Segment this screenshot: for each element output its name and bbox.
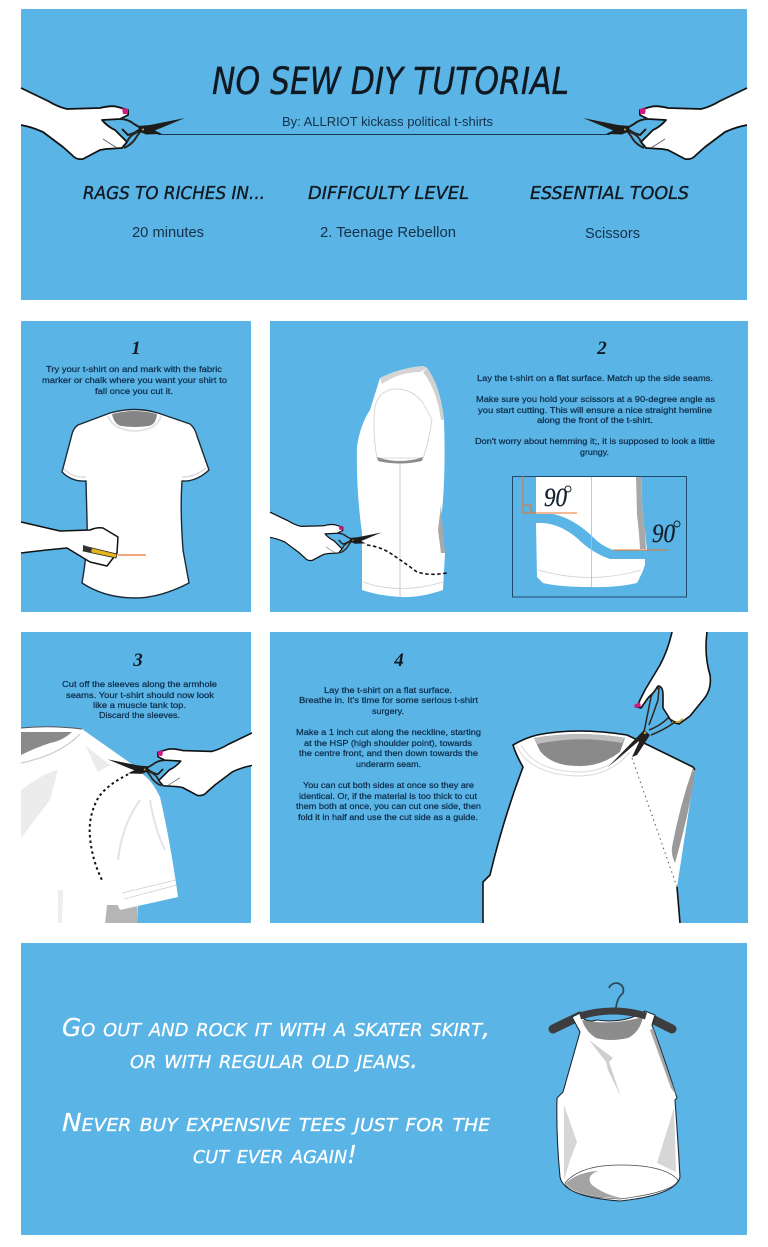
step 2 instructions: you start cutting. This will ensure a nice straight hemline [478,405,712,415]
panel: header [21,9,747,300]
orange mark line [118,554,146,556]
icon: left hand with scissors [21,88,185,159]
closing text: Never buy expensive tees just for the [62,1108,491,1137]
step 4 instructions: fold it in half and use the cut side as a guide. [298,812,478,822]
step 1 instructions [42,364,227,396]
step 1 instructions: fall once you cut it. [95,386,173,396]
cutting line [158,134,610,136]
heading: essential tools: ESSENTIAL TOOLS [530,183,689,204]
step 2 instructions: Don't worry about hemming it;, it is supposed to look a little [475,436,715,446]
right angle line [613,549,668,551]
diagram: hem curve detail [512,476,686,597]
step 3 instructions [62,679,217,720]
heading: rags to riches: RAGS TO RICHES IN... [83,183,265,204]
tank details [564,1017,678,1199]
closing text: Go out and rock it with a skater skirt, [62,1013,490,1042]
icon: hand with scissors from above [608,632,710,767]
t-shirt shoulder close-up [21,727,178,923]
step 2 instructions: Make sure you hold your scissors at a 90-degree angle as [476,394,715,404]
step 4 instructions: Lay the t-shirt on a flat surface. [324,685,452,695]
t-shirt side view [357,366,445,597]
label: 90 degrees right: 90 [652,519,675,548]
step 4 instructions: them both at once, you can cut one side, then [296,801,481,811]
panel: step 3 [21,632,252,923]
icon: hand with scissors [108,733,252,796]
icon: hand with scissors [270,512,382,561]
step 1 instructions: marker or chalk where you want your shirt to [42,375,227,385]
title: NO SEW DIY TUTORIAL [212,60,569,103]
step number 2: 2 [596,338,607,359]
step 1 instructions: Try your t-shirt on and mark with the fabric [46,364,222,374]
hanger arms [553,1016,672,1029]
step 2 instructions: grungy. [580,447,609,457]
step 4 instructions: You can cut both sides at once so they are [303,780,474,790]
step 4 instructions: identical. Or, if the material is too thick to cut [299,791,478,801]
step 2 instructions [475,373,715,457]
tank body [557,1011,680,1201]
dotted cut guide [632,758,677,887]
panel: step 1 [21,321,251,612]
byline: By: ALLRIOT kickass political t-shirts [282,115,493,129]
step number 3: 3 [132,650,143,671]
icon: right hand with scissors [583,88,747,159]
closing text [62,1013,491,1169]
step 4 instructions: Breathe in. It's time for some serious t-shirt [299,695,479,705]
step 4 instructions: at the HSP (high shoulder point), towards [304,738,472,748]
t-shirt front [62,410,209,598]
panel: step 2 [270,321,748,612]
cutting guide dashed [367,545,447,574]
value: difficulty: 2. Teenage Rebellon [320,225,456,241]
step 4 instructions: surgery. [372,706,404,716]
step 3 instructions: Discard the sleeves. [99,710,180,720]
step number 1: 1 [131,338,141,359]
left right-angle marker [523,476,577,513]
step 3 instructions: like a muscle tank top. [93,700,186,710]
step 4 instructions: the centre front, and then down towards the [299,748,478,758]
step 2 instructions: along the front of the t-shirt. [537,415,653,425]
value: time: 20 minutes [132,225,204,241]
step 4 instructions: Make a 1 inch cut along the neckline, starting [296,727,481,737]
heading: difficulty level: DIFFICULTY LEVEL [308,183,469,204]
icon: hand with marker [21,522,118,566]
panel: step 4 [270,632,748,923]
step 4 instructions: underarm seam. [356,759,421,769]
value: tools: Scissors [585,226,640,242]
step 3 instructions: seams. Your t-shirt should now look [66,690,215,700]
closing text: or with regular old jeans. [130,1045,418,1074]
panel: closing message [21,943,747,1235]
step 2 instructions: Lay the t-shirt on a flat surface. Match up the side seams. [477,373,713,383]
step 3 instructions: Cut off the sleeves along the armhole [62,679,217,689]
dotted armhole seam [90,772,133,880]
step number 4: 4 [393,650,404,671]
icon: tank top on hanger [553,983,680,1201]
closing text: cut ever again! [193,1140,357,1169]
hanger hook and shoulder bar [580,983,646,1016]
step 4 instructions [296,685,481,822]
label: 90 degrees left: 90 [544,483,567,512]
t-shirt with neckline [483,731,695,923]
